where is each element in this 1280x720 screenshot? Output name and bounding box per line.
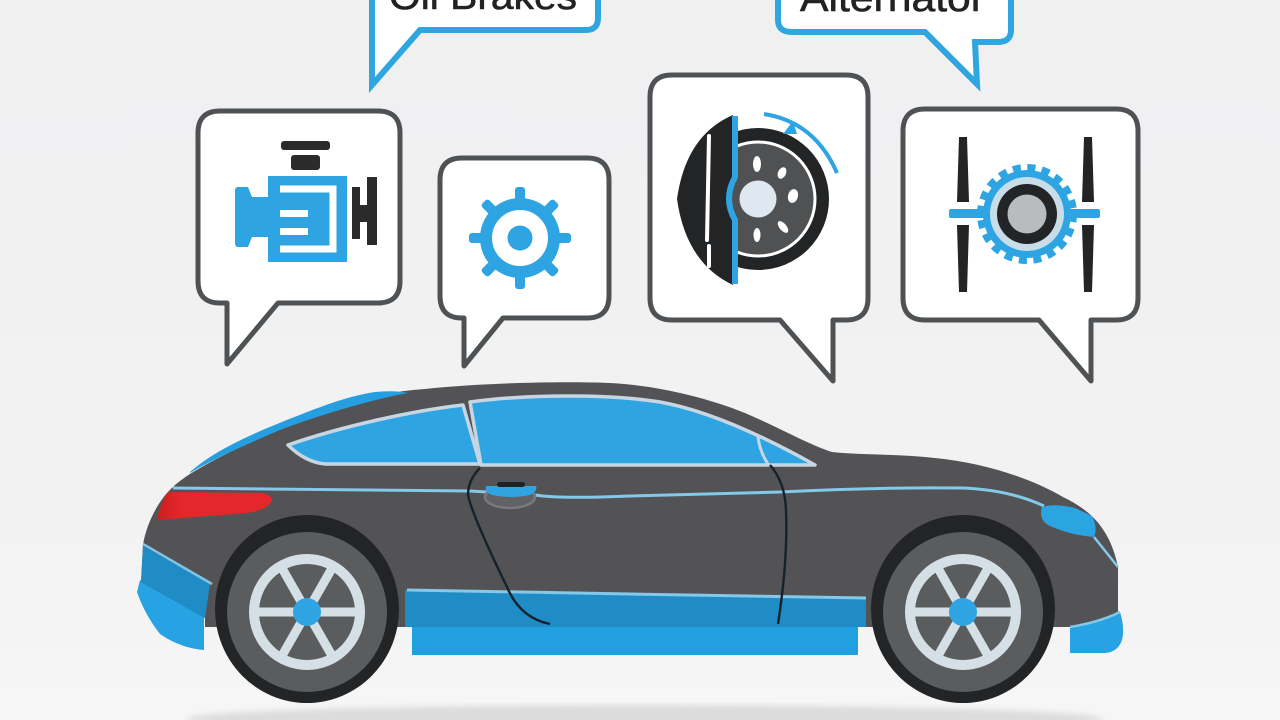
front lower bumper (1070, 612, 1123, 653)
icon: engine (235, 141, 377, 262)
panel: engine bubble (198, 111, 400, 364)
side sill (412, 622, 858, 655)
belt line (173, 488, 1044, 506)
icon: brake disc (677, 114, 837, 285)
door handle (485, 482, 536, 508)
rear wheel (215, 515, 399, 703)
front window (470, 396, 815, 465)
ground shadow (187, 705, 1103, 720)
callout: Oil Brakes (372, 0, 598, 85)
panel: brake bubble (650, 75, 868, 381)
rear quarter panel (141, 546, 210, 618)
door lines (468, 468, 550, 624)
rear lower bumper (137, 580, 204, 650)
car (137, 382, 1123, 703)
icon: alternator gear (949, 137, 1100, 292)
icon: gear (469, 187, 571, 289)
tail light (157, 492, 272, 520)
headlight (1041, 505, 1096, 537)
door sill band (405, 590, 866, 627)
roof highlight (190, 391, 408, 473)
panel: gear bubble (440, 158, 609, 366)
panel: alternator bubble (903, 109, 1138, 381)
car body (141, 382, 1118, 627)
callout: Alternator (778, 0, 1011, 84)
rear window (288, 405, 480, 464)
front wheel (871, 515, 1055, 703)
